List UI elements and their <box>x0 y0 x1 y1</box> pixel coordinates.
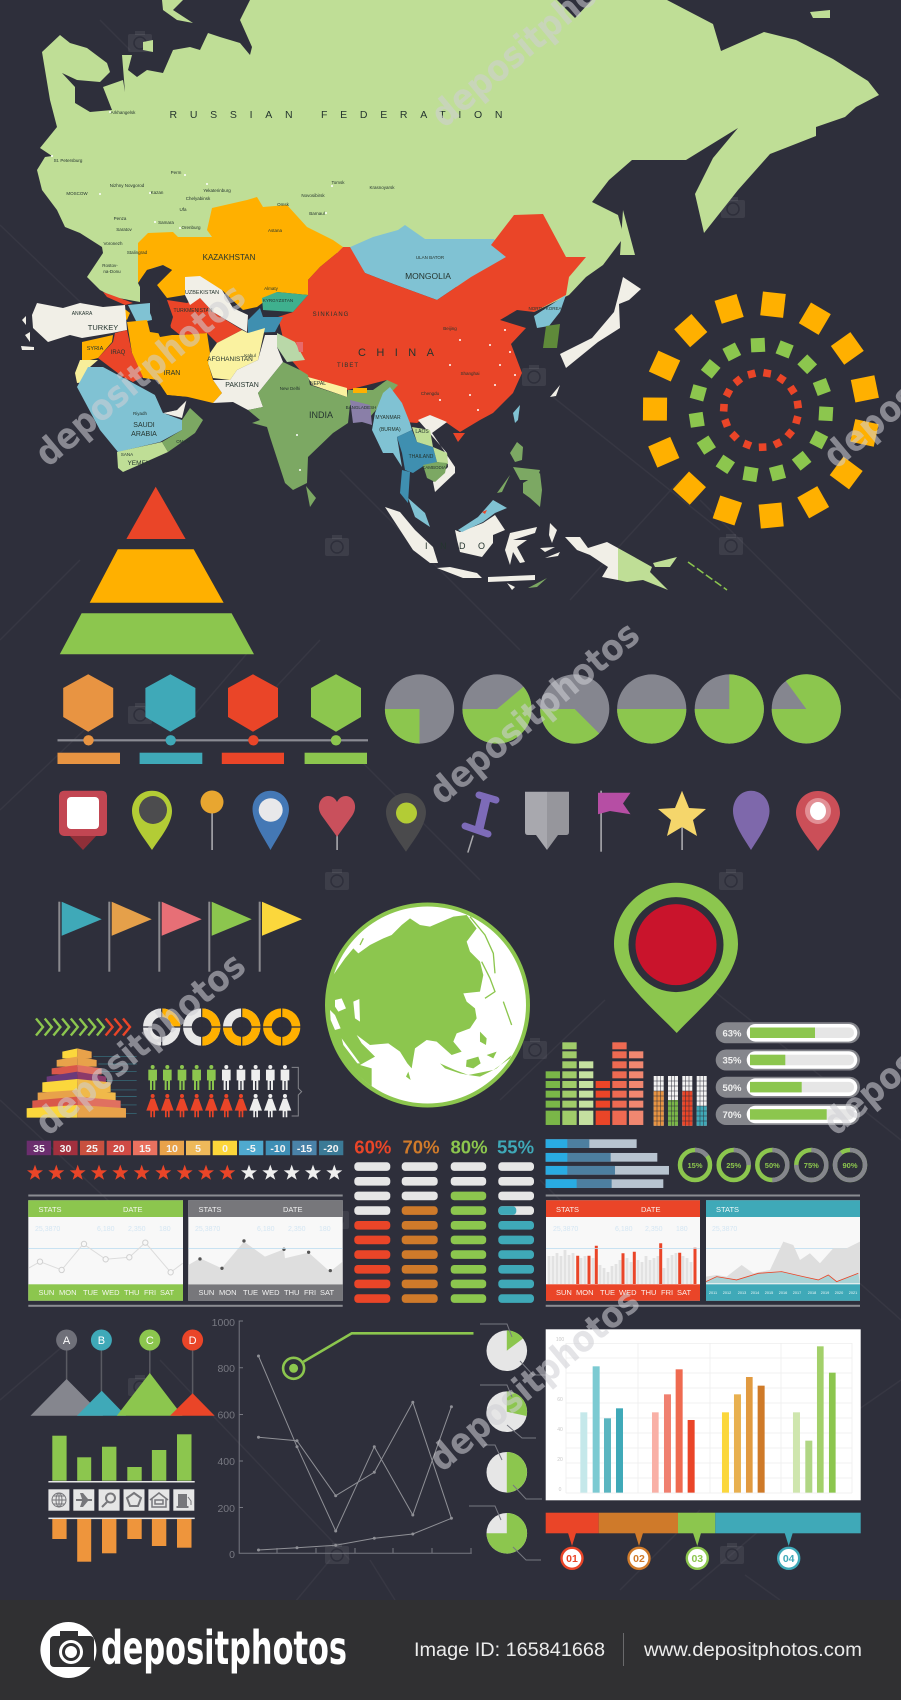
map labels: RUSSIAN FEDERATION <box>170 109 502 121</box>
temperature scale: -5 <box>246 1143 256 1155</box>
Caspian Sea <box>138 265 172 337</box>
white grouped bar chart <box>546 1329 861 1500</box>
map labels: Rostov- <box>102 263 118 268</box>
panel: teal stats area chart: 2013 <box>738 1291 746 1295</box>
Cambodia <box>423 462 447 482</box>
map labels: TURKEY <box>88 323 118 332</box>
icon: airplane <box>76 1493 92 1507</box>
panel: green stats line chart: TUE <box>83 1288 98 1297</box>
large green location pin <box>614 883 738 1033</box>
panel: red stats bar chart: 2,350 <box>645 1226 663 1233</box>
map labels: Riyadh <box>133 411 147 416</box>
chevron arrows <box>36 1018 130 1036</box>
map labels: BANGLADESH <box>346 405 376 410</box>
white grouped bar chart: 60 <box>557 1397 563 1403</box>
map labels: Krasnoyarsk <box>369 185 395 190</box>
East Asian island strands <box>335 917 512 1025</box>
Afghanistan <box>208 328 265 380</box>
Kashmir <box>277 333 305 362</box>
Oman <box>162 408 203 452</box>
panel: green stats line chart: THU <box>124 1288 139 1297</box>
icon: star badge <box>127 1493 141 1506</box>
map labels: ANKARA <box>72 311 93 317</box>
line chart: 800 <box>217 1363 235 1375</box>
middle green ring <box>689 338 833 482</box>
icon: magenta flag <box>598 791 630 852</box>
map labels: Omsk <box>277 202 290 207</box>
map labels: Arkhangelsk <box>111 110 136 115</box>
temperature scale: 20 <box>113 1143 125 1155</box>
temperature scale: 15 <box>139 1143 151 1155</box>
map of Asia <box>21 0 879 590</box>
panel: green stats line chart: FRI <box>144 1288 156 1297</box>
map labels: na-Donu <box>103 269 121 274</box>
panel: teal stats area chart: 2014 <box>751 1291 759 1295</box>
ABCD mountain chart: B <box>98 1335 105 1347</box>
panel: grey stats area chart: WED <box>262 1288 280 1297</box>
map labels: INDIA <box>309 410 333 420</box>
panel: teal stats area chart <box>706 1200 860 1301</box>
percent rings: 25% <box>726 1161 742 1170</box>
map labels: Kazan <box>151 190 164 195</box>
panel: green stats line chart: STATS <box>38 1205 62 1214</box>
temperature scale: -10 <box>270 1143 286 1155</box>
panel: green stats line chart: WED <box>102 1288 120 1297</box>
icon: house <box>150 1493 168 1507</box>
temperature scale: 0 <box>222 1143 228 1155</box>
stacked pyramid <box>60 487 254 654</box>
map labels: Perm <box>171 170 182 175</box>
triangular flags <box>58 902 302 972</box>
map labels: Almaty <box>264 286 279 291</box>
map labels: SINKIANG <box>313 312 349 318</box>
city dots <box>51 111 516 471</box>
panel: grey stats area chart: 180 <box>319 1226 331 1233</box>
map labels: Novosibirsk <box>301 193 325 198</box>
temperature scale: 30 <box>60 1143 71 1155</box>
panel: teal stats area chart: 25,3870 <box>712 1226 737 1233</box>
Tajikistan <box>248 308 283 333</box>
icon: globe <box>52 1493 66 1507</box>
panel: red stats bar chart: WED <box>619 1288 637 1297</box>
icon: orange ball pin <box>200 790 224 850</box>
panel: green stats line chart: DATE <box>123 1205 142 1214</box>
footer bar <box>0 1600 901 1700</box>
line chart: 0 <box>229 1549 235 1561</box>
panel: grey stats area chart: FRI <box>304 1288 316 1297</box>
panel: red stats bar chart: TUE <box>600 1288 615 1297</box>
panel: grey stats area chart: SUN <box>198 1288 214 1297</box>
people pictogram <box>146 1065 302 1117</box>
map labels: CAMBODIA <box>422 465 446 470</box>
white grouped bar chart: 100 <box>556 1337 564 1343</box>
map labels: THAILAND <box>409 454 434 460</box>
icon: heart pin <box>319 796 355 850</box>
Java and Lesser Sunda <box>437 567 535 590</box>
panel: red stats bar chart: 25,3870 <box>553 1226 578 1233</box>
Turkey <box>32 303 127 342</box>
panel: teal stats area chart: 2011 <box>709 1291 717 1295</box>
map labels: Voronezh <box>103 241 123 246</box>
ABCD mountain chart: D <box>189 1335 197 1347</box>
map labels: UZBEKISTAN <box>185 290 219 296</box>
panel: grey stats area chart: STATS <box>198 1205 222 1214</box>
Timor <box>528 578 547 588</box>
watermark cameras <box>128 31 745 1564</box>
map labels: MYANMAR <box>375 415 401 421</box>
line chart: 400 <box>217 1456 235 1468</box>
Peninsular Malaysia <box>408 498 430 527</box>
website: www.depositphotos.com <box>643 1640 862 1661</box>
icon: grey marker <box>525 792 569 850</box>
panel: red stats bar chart: SAT <box>677 1288 691 1297</box>
Sumatra <box>385 507 438 563</box>
icon: fuel pump <box>176 1494 191 1508</box>
ABCD mountain chart <box>30 1330 215 1416</box>
Aksai patch <box>296 342 303 352</box>
icon bar chart <box>48 1434 195 1562</box>
map labels: Beijing <box>443 326 457 331</box>
Iraq <box>98 330 143 382</box>
map labels: NORTH KOREA <box>529 306 561 311</box>
panel: teal stats area chart: 2015 <box>765 1291 773 1295</box>
panel: teal stats area chart: 2017 <box>793 1291 801 1295</box>
panel: grey stats area chart: MON <box>219 1288 236 1297</box>
map labels: Ufa <box>179 207 187 212</box>
map labels: SANA <box>121 452 133 457</box>
line chart: 200 <box>217 1503 235 1515</box>
percent level columns: 55% <box>497 1136 534 1158</box>
panel: teal stats area chart: 2019 <box>821 1291 829 1295</box>
panel: green stats line chart <box>28 1200 183 1301</box>
Papua New Guinea <box>618 548 677 590</box>
panel: green stats line chart: 2,350 <box>128 1226 146 1233</box>
percent level columns: 70% <box>402 1136 440 1158</box>
percent level columns: 60% <box>354 1136 391 1158</box>
China <box>278 214 586 442</box>
Yemen <box>117 442 168 472</box>
Bangladesh <box>350 400 372 425</box>
segmented donut row <box>141 1007 302 1047</box>
Uzbekistan <box>185 276 248 332</box>
percent level columns <box>354 1136 534 1303</box>
panel: teal stats area chart: 2020 <box>835 1291 843 1295</box>
Malaysian Borneo <box>458 500 507 532</box>
diagonal watermarks: depositphotos <box>421 614 648 813</box>
Borneo <box>455 515 505 557</box>
map labels: Yekaterinburg <box>203 188 231 193</box>
map labels: MONGOLIA <box>405 271 451 281</box>
icon: magnifier <box>102 1494 115 1507</box>
stacked level columns <box>653 1076 707 1126</box>
diagonal watermarks: depositphotos <box>421 1281 648 1480</box>
inner red ring <box>720 369 802 451</box>
map labels: SYRIA <box>87 346 104 352</box>
map labels: New Delhi <box>280 386 300 391</box>
panel: grey stats area chart: 25,3870 <box>195 1226 220 1233</box>
panel: red stats bar chart: 180 <box>676 1226 688 1233</box>
map labels: INDO <box>425 541 485 551</box>
white grouped bar chart: 20 <box>557 1457 563 1463</box>
equalizer chart <box>546 1042 643 1125</box>
panel: grey stats area chart: SAT <box>320 1288 334 1297</box>
map labels: Chengdu <box>421 391 440 396</box>
map labels: OMAN <box>176 439 190 444</box>
map labels: PAKISTAN <box>225 382 259 389</box>
map labels: Penza <box>114 216 127 221</box>
diagonal watermarks: depositphotos <box>27 945 254 1144</box>
map labels: St. Petersburg <box>54 158 83 163</box>
map labels: NEPAL <box>310 381 326 387</box>
panel: grey stats area chart: 2,350 <box>288 1226 306 1233</box>
3D stepped pyramid <box>27 1048 137 1118</box>
ABCD mountain chart: C <box>146 1335 154 1347</box>
panel: teal stats area chart: 2012 <box>723 1291 731 1295</box>
percent rings <box>680 1150 865 1180</box>
panel: red stats bar chart: 6,180 <box>615 1226 633 1233</box>
small pies with leader lines <box>469 1324 550 1560</box>
Aegean islands <box>21 316 34 350</box>
map labels: MOSCOW <box>66 191 88 196</box>
segmented legend bar: 04 <box>783 1553 795 1565</box>
progress bars: 70% <box>722 1110 742 1121</box>
Iran <box>127 320 222 403</box>
percent rings: 50% <box>765 1161 780 1170</box>
progress bars: 50% <box>722 1083 742 1094</box>
percent rings: 75% <box>804 1161 819 1170</box>
map labels: Astana <box>268 228 282 233</box>
ABCD mountain chart: A <box>63 1335 71 1347</box>
icon: yellow star pin <box>658 791 706 850</box>
temperature scale <box>27 1141 343 1155</box>
temperature scale: -20 <box>323 1143 339 1155</box>
UAE <box>163 398 187 418</box>
percent rings: 90% <box>842 1161 858 1170</box>
segmented legend bar: 03 <box>691 1553 703 1565</box>
map labels: KAZAKHSTAN <box>203 253 256 262</box>
Brunei <box>482 510 487 514</box>
Syria <box>82 335 113 362</box>
segmented legend bar: 01 <box>566 1553 578 1565</box>
Mongolia <box>348 225 509 300</box>
Turkmenistan <box>167 298 242 343</box>
icon: blue pin <box>252 791 289 850</box>
logo wordmark: depositphotos <box>101 1621 347 1675</box>
white grouped bar chart: 0 <box>559 1487 562 1493</box>
Pakistan <box>213 335 283 410</box>
Laos <box>412 427 448 464</box>
segmented legend bar: 02 <box>633 1553 645 1565</box>
percent level columns: 80% <box>450 1136 488 1158</box>
Taiwan <box>513 405 520 423</box>
map labels: Kabul <box>244 353 256 358</box>
map labels: Orenburg <box>181 225 201 230</box>
Southeast Asian islands <box>406 1032 512 1080</box>
panel: green stats line chart: 6,180 <box>97 1226 115 1233</box>
temperature scale: 10 <box>166 1143 178 1155</box>
inland seas <box>330 998 360 1063</box>
globe <box>320 902 530 1108</box>
hexagon timeline <box>58 674 368 764</box>
map labels: (BURMA) <box>379 427 401 433</box>
panel: green stats line chart: 25,3870 <box>35 1226 60 1233</box>
Russia <box>37 0 879 312</box>
map labels: Nizhny Novgorod <box>110 183 145 188</box>
map labels: TURKMENISTAN <box>173 308 213 314</box>
map labels: TIBET <box>337 363 359 369</box>
Kazakhstan <box>138 197 343 310</box>
map labels: KYRGYZSTAN <box>263 298 293 303</box>
temperature scale: 5 <box>195 1143 201 1155</box>
panel: red stats bar chart: MON <box>576 1288 594 1297</box>
Bhutan <box>353 388 367 393</box>
concentric square rings <box>643 291 879 529</box>
panel: grey stats area chart: THU <box>284 1288 299 1297</box>
North Korea <box>534 295 566 328</box>
Papua <box>565 537 618 580</box>
map labels: Stalingrad <box>127 250 148 255</box>
panel: red stats bar chart: STATS <box>556 1205 579 1214</box>
panel: red stats bar chart: THU <box>641 1288 656 1297</box>
Vietnam <box>418 415 455 492</box>
panel: teal stats area chart: 2016 <box>779 1291 787 1295</box>
map labels <box>54 109 561 551</box>
Japan <box>550 277 641 397</box>
Solomon Islands <box>688 562 727 590</box>
segmented legend bar <box>546 1513 861 1569</box>
panel: grey stats area chart: 6,180 <box>257 1226 275 1233</box>
panel: green stats line chart: MON <box>59 1288 76 1297</box>
Azerbaijan <box>128 303 152 323</box>
map labels: Samara <box>158 220 174 225</box>
diagonal watermarks: depositphotos <box>27 276 254 475</box>
horizontal stacked bars <box>546 1139 669 1188</box>
map labels: LAOS <box>415 429 429 435</box>
panel: red stats bar chart: DATE <box>641 1205 660 1214</box>
white grouped bar chart: 40 <box>557 1427 563 1433</box>
icon: square red pin <box>59 791 107 850</box>
Arctic islands <box>143 0 830 255</box>
icon: dark pin <box>386 793 426 852</box>
outer orange ring <box>643 291 879 529</box>
map labels: AFGHANISTAN <box>207 356 253 363</box>
map labels: Shanghai <box>460 371 480 376</box>
Kyrgyzstan <box>262 292 308 312</box>
line chart <box>212 1317 472 1561</box>
Sulawesi <box>505 527 537 565</box>
temperature scale: 35 <box>33 1143 45 1155</box>
map labels: IRAN <box>164 370 180 377</box>
temperature scale: 25 <box>86 1143 98 1155</box>
South Korea <box>543 324 560 348</box>
Persian Gulf <box>143 378 188 413</box>
map labels: CHINA <box>358 347 435 359</box>
panel: teal stats area chart: 2021 <box>849 1291 857 1295</box>
map labels: ARABIA <box>131 431 157 438</box>
panel: red stats bar chart: FRI <box>661 1288 673 1297</box>
map labels: Saratov <box>116 227 133 232</box>
Georgia region <box>103 292 133 305</box>
green callout marker <box>283 1333 474 1379</box>
Jordan and Levant <box>75 360 98 383</box>
icon: purple push pin <box>465 795 496 852</box>
Moluccas <box>540 523 560 558</box>
icon: lime pin <box>132 791 172 850</box>
Armenia <box>120 307 130 320</box>
panel: red stats bar chart <box>546 1200 700 1301</box>
panel: green stats line chart: 180 <box>159 1226 171 1233</box>
map labels: YEMEN <box>127 460 151 467</box>
map labels: SAUDI <box>133 422 155 429</box>
image id: Image ID: 165841668 <box>414 1640 605 1661</box>
Eurasia and Africa landmass <box>329 915 484 1086</box>
logo: camera in circle <box>40 1622 96 1678</box>
panel: green stats line chart: SAT <box>160 1288 174 1297</box>
panel: grey stats area chart <box>188 1200 343 1301</box>
map labels: ULAN BATOR <box>416 255 445 260</box>
Sri Lanka <box>306 486 316 507</box>
line chart: 1000 <box>212 1317 235 1329</box>
panel: teal stats area chart: STATS <box>716 1205 739 1214</box>
Saudi Arabia <box>77 367 182 452</box>
map labels: Barnaul <box>309 211 325 216</box>
star rating <box>27 1165 342 1180</box>
pie chart row <box>385 674 841 744</box>
map pins row <box>59 790 840 852</box>
Thailand <box>397 430 437 503</box>
map labels: IRAQ <box>111 350 126 356</box>
temperature scale: -15 <box>297 1143 312 1155</box>
Nepal <box>308 377 347 397</box>
Philippines <box>497 442 542 507</box>
India <box>248 362 398 490</box>
panel: grey stats area chart: DATE <box>283 1205 302 1214</box>
percent rings: 15% <box>687 1161 703 1170</box>
panel: red stats bar chart: SUN <box>556 1288 572 1297</box>
panel: green stats line chart: SUN <box>38 1288 54 1297</box>
icon: purple drop <box>733 791 770 850</box>
map labels: Tomsk <box>331 180 345 185</box>
Myanmar <box>372 387 412 467</box>
progress bars <box>716 1022 860 1125</box>
progress bars: 63% <box>722 1028 742 1040</box>
map labels: Chelyabinsk <box>186 196 211 201</box>
progress bars: 35% <box>722 1056 742 1067</box>
icon: red location pin <box>796 791 840 851</box>
line chart: 600 <box>217 1410 235 1422</box>
panel: teal stats area chart: 2018 <box>808 1291 816 1295</box>
panel: grey stats area chart: TUE <box>243 1288 258 1297</box>
